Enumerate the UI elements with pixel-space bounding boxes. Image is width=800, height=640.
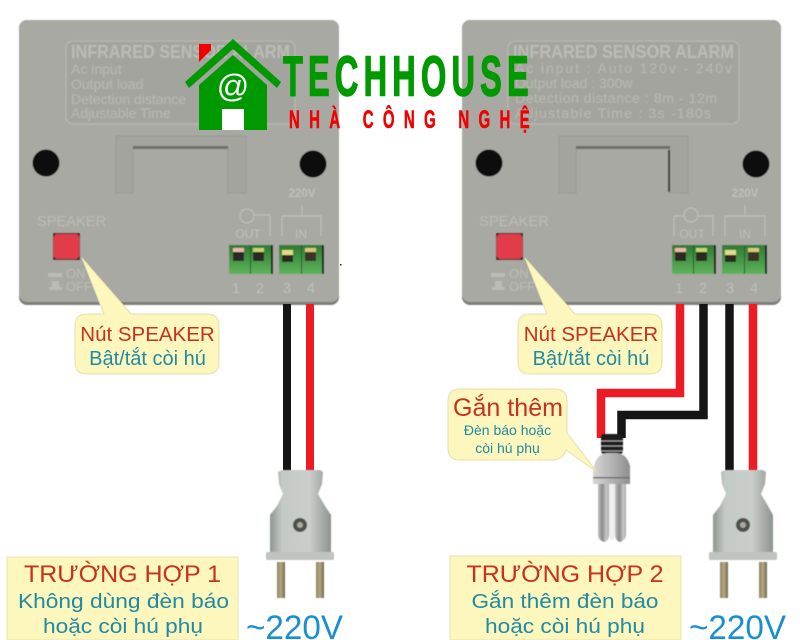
panel: right device: 220V	[732, 188, 759, 200]
terminal numbers right: 4	[750, 281, 758, 297]
panel: case 1: Không dùng đèn báo	[18, 590, 229, 613]
nameplate left: Output load	[71, 76, 143, 92]
icon: right plug	[709, 470, 777, 598]
terminal numbers right: 2	[699, 281, 707, 297]
panel: left device	[19, 20, 339, 305]
on off labels right: ON	[509, 266, 528, 281]
stray dot	[340, 264, 342, 266]
terminal numbers right: 1	[675, 281, 683, 297]
terminals left	[229, 245, 324, 274]
callout: speaker button left: Bật/tắt còi hú	[89, 347, 206, 370]
terminal numbers left: 1	[232, 281, 240, 297]
nameplate left	[66, 41, 295, 124]
panel: right device: OUT	[679, 227, 705, 241]
callout: add-on lamp: Đèn báo hoặc	[464, 422, 551, 438]
callout: speaker button right: Nút SPEAKER	[524, 323, 658, 346]
panel: case 1	[7, 557, 238, 640]
speaker label right: SPEAKER	[479, 213, 549, 230]
callout: speaker button right: Bật/tắt còi hú	[533, 347, 649, 370]
terminal numbers right: 3	[726, 281, 734, 297]
on off labels left: ON	[66, 266, 86, 281]
terminal numbers left	[232, 281, 315, 297]
nameplate left: Ac input	[71, 61, 122, 77]
nameplate right	[508, 41, 739, 124]
panel: case 2: Gắn thêm đèn báo	[472, 590, 658, 613]
on off labels left	[48, 266, 92, 294]
output and input marks left	[240, 205, 321, 236]
speaker button left	[53, 233, 80, 260]
nameplate right: Ac input : Auto 120v - 240v	[515, 60, 732, 76]
logo chimney	[199, 44, 211, 62]
terminals right	[672, 245, 767, 274]
wires: right device	[601, 304, 753, 472]
terminal numbers left: 4	[307, 281, 315, 297]
speaker button right	[496, 233, 523, 260]
logo: Techhouse	[185, 39, 530, 134]
nameplate left: INFRARED SENSOR ALARM	[71, 42, 290, 62]
logo house: @	[217, 68, 249, 104]
panel: right device: IN	[739, 227, 751, 241]
panel: case 1: hoặc còi hú phụ	[43, 615, 203, 638]
logo tagline: NHÀ CÔNG NGHỆ	[289, 105, 530, 134]
on off labels left: OFF	[66, 279, 92, 294]
callout: add-on lamp: Gắn thêm	[453, 393, 563, 422]
on off labels right	[491, 266, 535, 294]
panel: case 2	[450, 556, 681, 640]
output and input marks right	[674, 205, 765, 236]
panel: case 2: TRƯỜNG HỢP 2	[466, 561, 664, 588]
panel: case 2: hoặc còi hú phụ	[485, 615, 645, 638]
callout: speaker button right	[518, 258, 662, 374]
nameplate left: Adjustable Time	[71, 105, 171, 121]
callout: add-on lamp: còi hú phụ	[475, 440, 540, 456]
panel: left device: IN	[295, 227, 307, 241]
terminal numbers left: 2	[256, 281, 264, 297]
wires: left device	[283, 304, 314, 472]
panel: case 1: TRƯỜNG HỢP 1	[24, 561, 221, 588]
on off labels right: OFF	[509, 279, 535, 294]
speaker label left: SPEAKER	[37, 213, 106, 230]
bracket right	[559, 136, 688, 193]
icon: left plug	[266, 470, 334, 598]
callout: add-on lamp	[448, 389, 597, 472]
mounting holes left	[32, 150, 326, 178]
nameplate right: Detection distance : 8m - 12m	[515, 90, 717, 106]
panel: left device: 220V	[289, 188, 316, 200]
terminal numbers right	[675, 281, 758, 297]
terminal numbers left: 3	[283, 281, 291, 297]
icon: light bulb	[593, 434, 630, 542]
nameplate right: INFRARED SENSOR ALARM	[513, 42, 734, 62]
bracket left	[116, 136, 246, 193]
callout: speaker button left	[75, 258, 219, 374]
panel: left device: OUT	[235, 227, 261, 241]
logo house	[185, 39, 281, 130]
nameplate right: Output load : 300w	[515, 75, 633, 91]
nameplate left: Detection distance	[71, 91, 186, 107]
mounting holes right	[476, 150, 770, 178]
logo wordmark: TECHHOUSE	[283, 44, 529, 108]
nameplate right: Adjustable Time : 3s -180s	[515, 105, 711, 121]
panel: right device	[462, 20, 781, 305]
callout: speaker button left: Nút SPEAKER	[80, 323, 215, 346]
